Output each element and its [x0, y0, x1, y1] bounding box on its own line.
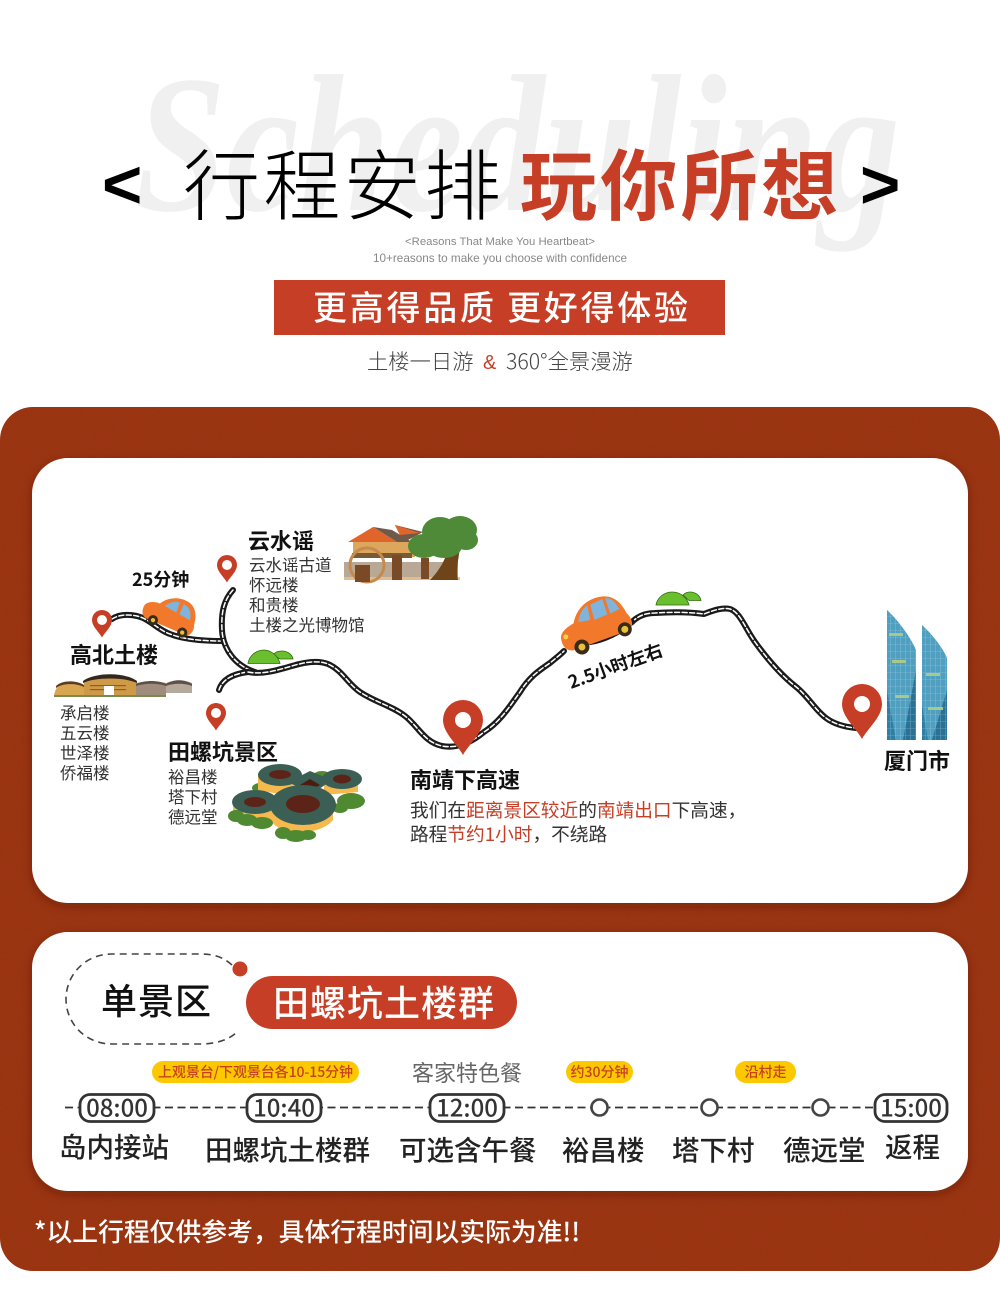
- icon: pin Xiamen: [842, 684, 882, 739]
- label: Xiamen: 厦门市: [884, 744, 950, 776]
- stop labels: 德远堂: [783, 1128, 866, 1168]
- English subtitle: [373, 236, 627, 265]
- labels: Nanjing exit: 我们在距离景区较近的南靖出口下高速，: [410, 796, 746, 823]
- labels: Yunshuiyao: 怀远楼: [249, 572, 298, 596]
- icon: pin Gaobei: [92, 610, 112, 638]
- stop marker 3: [812, 1100, 828, 1116]
- illustration: Gaobei tulou: [54, 674, 192, 697]
- labels: Gaobei tulou: 承启楼: [60, 700, 110, 724]
- time box 15:00: 15:00: [880, 1088, 942, 1124]
- tag: 30 minutes: 约30分钟: [571, 1062, 628, 1082]
- timeline dashed line: [65, 1106, 949, 1108]
- English subtitle: 10+reasons to make you choose with confidence: [373, 251, 627, 265]
- title: 行程安排: [183, 126, 501, 237]
- labels: Gaobei tulou: 五云楼: [60, 720, 110, 744]
- stop marker 2: [702, 1100, 718, 1116]
- stop labels: 返程: [885, 1125, 940, 1165]
- panel: brown background: [0, 407, 1000, 1271]
- note: Hakka meal: 客家特色餐: [412, 1056, 522, 1088]
- subheading: tour types: 土楼一日游: [367, 345, 474, 376]
- labels: Nanjing exit: [410, 763, 746, 847]
- stop marker 1: [592, 1100, 608, 1116]
- icon: pin Nanjing: [443, 700, 483, 755]
- labels: Tianluokeng: 田螺坑景区: [168, 735, 278, 767]
- badge: single scenic area: [66, 954, 248, 1044]
- labels: Yunshuiyao: 土楼之光博物馆: [249, 612, 364, 636]
- panel: route map: [32, 458, 968, 903]
- labels: Tianluokeng: 德远堂: [168, 804, 218, 828]
- stop labels: 田螺坑土楼群: [205, 1128, 370, 1168]
- title: <: [102, 146, 142, 223]
- road network: [112, 590, 856, 747]
- labels: Gaobei tulou: [60, 566, 189, 784]
- labels: Gaobei tulou: 侨福楼: [60, 760, 110, 784]
- title: [102, 126, 900, 237]
- title: 玩你所想: [520, 126, 838, 237]
- icon: orange car large: [553, 590, 637, 659]
- English subtitle: <Reasons That Make You Heartbeat>: [405, 236, 595, 248]
- badge: single scenic area: 单景区: [101, 973, 211, 1025]
- illustration: Tianluokeng tulou cluster: [228, 764, 365, 842]
- time box 08:00: 08:00: [86, 1088, 148, 1124]
- illustration: Xiamen twin towers: [887, 610, 947, 740]
- subheading: tour types: 360°全景漫游: [506, 345, 633, 376]
- labels: Tianluokeng: 裕昌楼: [168, 764, 218, 788]
- stop labels: 岛内接站: [59, 1125, 169, 1165]
- subheading: tour types: [367, 345, 633, 376]
- banner: quality slogan: 更高得品质 更好得体验: [313, 281, 688, 330]
- tag: walk along village: [735, 1061, 796, 1083]
- labels: Yunshuiyao: 云水谣: [248, 524, 314, 556]
- labels: Gaobei tulou: 高北土楼: [70, 638, 158, 670]
- icon: pin Tianluokeng: [206, 703, 226, 730]
- tag: walk along village: 沿村走: [744, 1062, 786, 1082]
- stop labels: 塔下村: [672, 1128, 754, 1168]
- label: drive time: 2.5小时左右: [564, 636, 666, 695]
- icon: pin Yunshuiyao: [217, 555, 237, 582]
- stop labels: [59, 1125, 940, 1168]
- illustration: Yunshuiyao house and tree: [344, 516, 478, 582]
- time box 10:40: 10:40: [253, 1088, 315, 1124]
- title: >: [860, 146, 900, 223]
- badge: Tianluokeng tulou cluster: 田螺坑土楼群: [273, 975, 494, 1027]
- time box 12:00: 12:00: [436, 1088, 498, 1124]
- labels: Gaobei tulou: 世泽楼: [60, 740, 110, 764]
- labels: Yunshuiyao: 和贵楼: [249, 592, 298, 616]
- stop labels: 裕昌楼: [562, 1128, 644, 1168]
- icon: green hills right: [656, 592, 701, 605]
- footnote: *以上行程仅供参考，具体行程时间以实际为准!!: [34, 1212, 580, 1249]
- labels: Yunshuiyao: 云水谣古道: [249, 552, 332, 576]
- icon: green hills left: [248, 650, 293, 664]
- labels: Nanjing exit: 南靖下高速: [410, 763, 520, 795]
- labels: Yunshuiyao: [248, 524, 364, 636]
- icon: orange car small: [138, 585, 204, 643]
- subheading: tour types: &: [483, 352, 497, 374]
- labels: Gaobei tulou: 25分钟: [132, 566, 189, 592]
- labels: Tianluokeng: [168, 735, 278, 828]
- panel: single scenic area schedule: [32, 932, 968, 1191]
- tag: observation deck time: 上观景台/下观景台各10-15分钟: [158, 1062, 353, 1082]
- stop labels: 可选含午餐: [399, 1128, 536, 1168]
- labels: Nanjing exit: 路程节约1小时，不绕路: [410, 820, 608, 847]
- labels: Tianluokeng: 塔下村: [168, 784, 218, 808]
